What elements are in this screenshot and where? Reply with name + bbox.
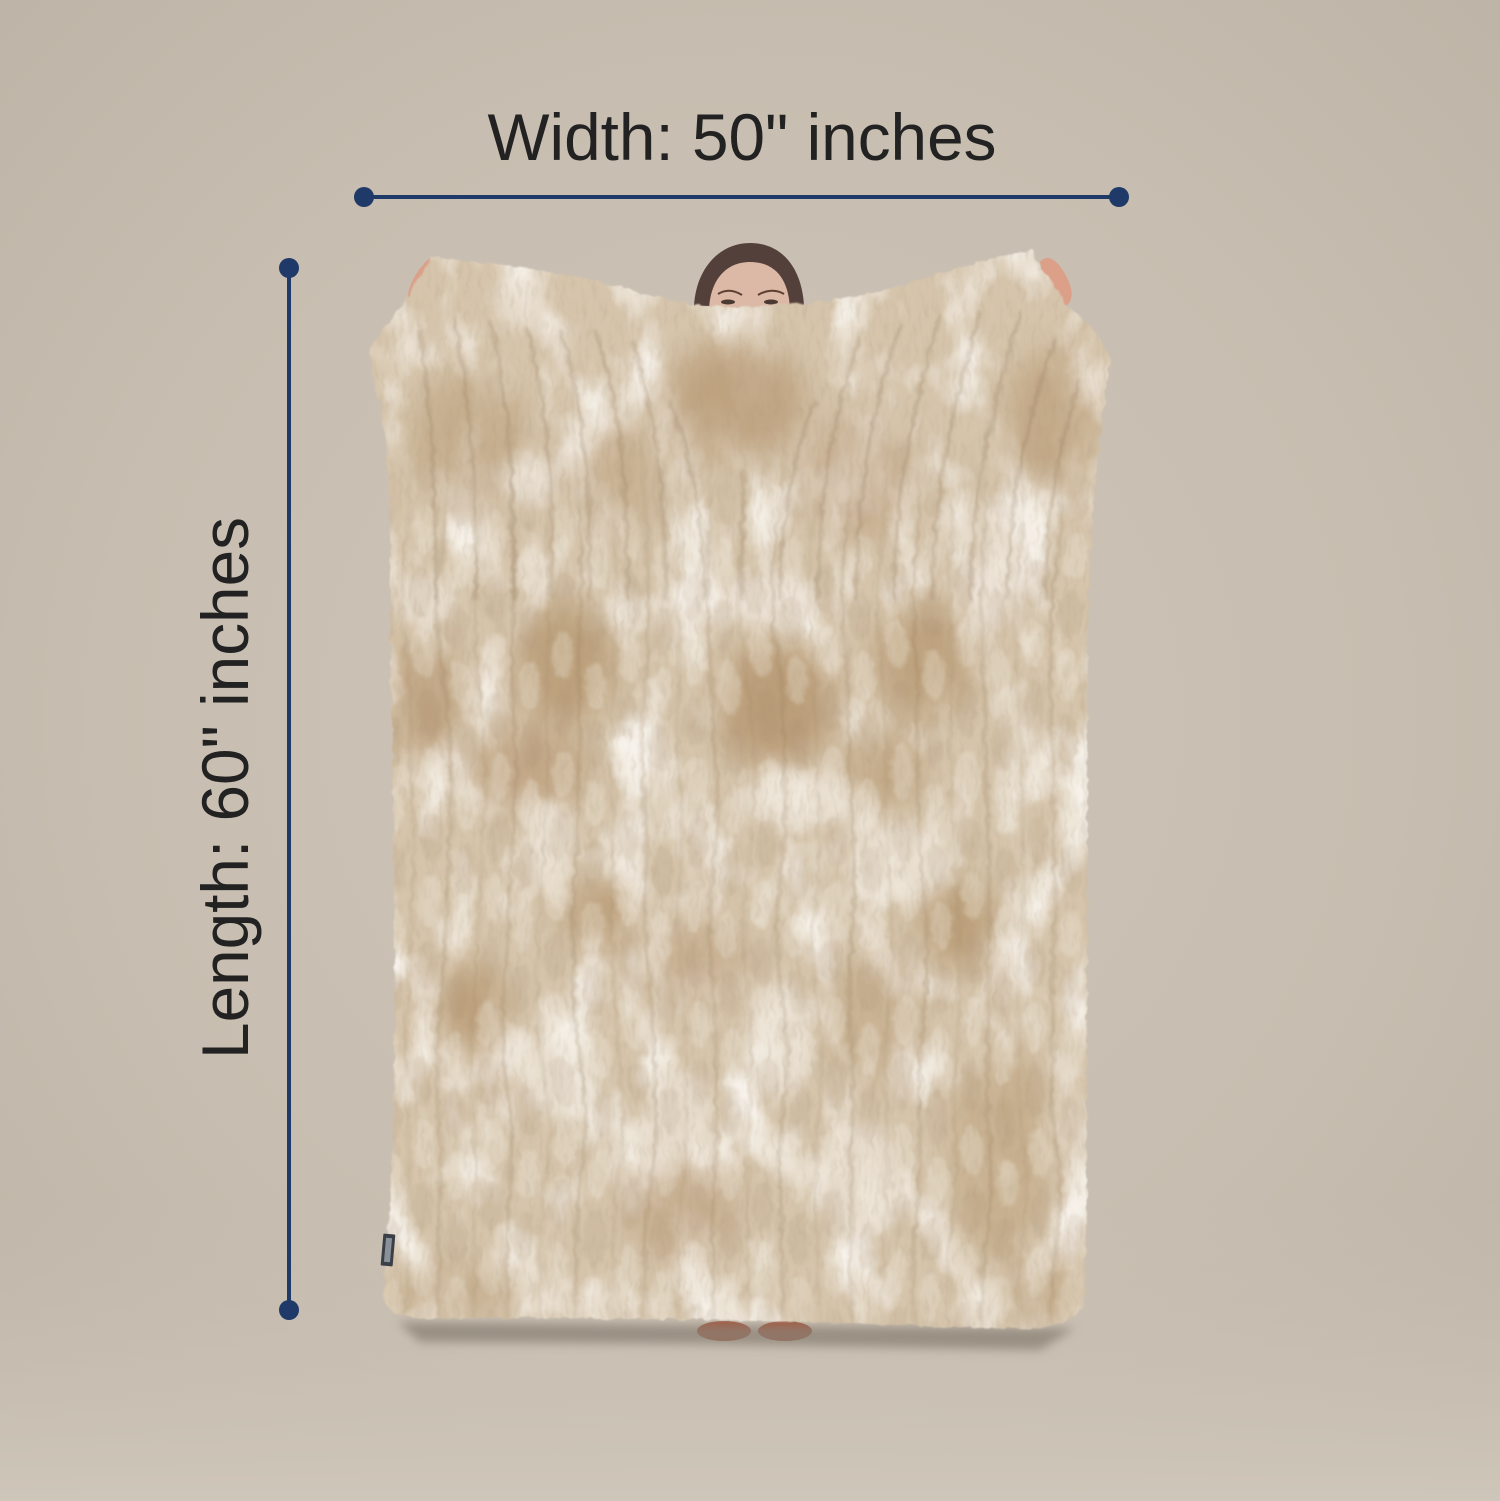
length dimension arrow xyxy=(279,258,299,1320)
length label: Length: 60" inches xyxy=(189,517,262,1059)
icon: face xyxy=(709,262,790,310)
blanket shadow on the floor xyxy=(398,1322,1075,1350)
quilted ribs xyxy=(384,474,1088,1328)
blanket xyxy=(370,248,1111,1330)
blanket base colour xyxy=(360,240,1120,1340)
tan blotches xyxy=(387,340,1095,1320)
fur texture xyxy=(360,240,1120,1340)
tie-dye noise xyxy=(360,240,1120,1340)
icon: right hand xyxy=(1040,258,1072,306)
title: width label: Width: 50" inches xyxy=(488,101,996,174)
width dimension arrow xyxy=(354,187,1129,207)
icon: eyes xyxy=(721,300,778,304)
cream highlights xyxy=(395,270,1030,1240)
icon: eyebrows xyxy=(718,291,784,295)
icon: left hand xyxy=(408,258,442,306)
fanned seams at the top of the blanket xyxy=(420,310,1080,600)
icon: hair xyxy=(694,243,804,306)
icon: feet xyxy=(697,1321,812,1341)
blanket label tag xyxy=(381,1234,395,1266)
person behind the blanket xyxy=(408,243,1072,1341)
